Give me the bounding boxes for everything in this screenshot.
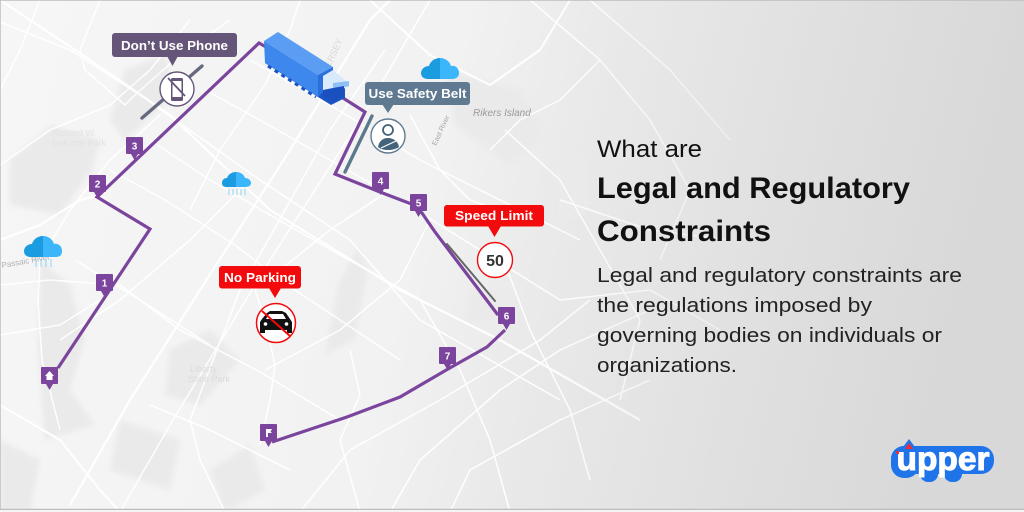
map labels: DeKorte Park [52, 138, 107, 148]
icon: rain cloud middle [222, 172, 251, 195]
pin: 3 [126, 137, 143, 160]
pin: home [41, 367, 58, 390]
map labels: East River [431, 114, 452, 147]
body text [597, 265, 962, 377]
pin: 7: 7 [445, 352, 451, 362]
pin: 4: 4 [378, 176, 384, 188]
body text: Legal and regulatory constraints are [597, 265, 962, 287]
icon: cloud top [421, 58, 459, 79]
heading: Constraints [597, 215, 771, 248]
heading [597, 136, 910, 248]
pin: 7 [439, 347, 456, 370]
pin: flag [260, 424, 277, 447]
callout: don't use phone: Don’t Use Phone [121, 38, 228, 53]
callout: speed limit: Speed Limit [455, 208, 534, 223]
callout: speed limit [444, 205, 544, 301]
body text: organizations. [597, 355, 737, 377]
pin: 5 [410, 194, 427, 217]
callout: use safety belt [345, 82, 470, 172]
pin: 6 [498, 307, 515, 330]
map labels [1, 37, 531, 384]
body text: governing bodies on individuals or [597, 325, 942, 347]
route line [58, 43, 505, 442]
heading: Legal and Regulatory [597, 172, 910, 205]
body text: the regulations imposed by [597, 295, 872, 317]
map labels: JERSEY [321, 37, 345, 73]
map labels: Richard W. [52, 128, 96, 138]
map labels: Rikers Island [473, 108, 531, 119]
logo: upper: upper [896, 440, 990, 477]
map labels: State Park [188, 374, 231, 384]
icon: no parking [256, 304, 296, 342]
pin: 2: 2 [95, 180, 101, 190]
pin: 2 [89, 175, 106, 198]
callout: don't use phone [112, 33, 237, 118]
pin: 5: 5 [416, 198, 422, 210]
icon: rain cloud left [24, 236, 62, 267]
map labels: Passaic River [1, 253, 51, 270]
icon: driver [371, 119, 405, 153]
pin: 4 [372, 172, 389, 195]
pin: 1: 1 [102, 278, 108, 290]
map labels: Liberty [190, 364, 218, 374]
truck [264, 32, 349, 105]
callout: no parking [219, 266, 301, 342]
pin: 1 [96, 274, 113, 297]
icon: no phone [160, 72, 194, 106]
pin: 3: 3 [132, 142, 138, 152]
route pins [41, 137, 515, 447]
callout: use safety belt: Use Safety Belt [368, 86, 467, 101]
callout: no parking: No Parking [224, 270, 296, 285]
pin: 6: 6 [504, 312, 510, 322]
icon: speed 50 sign: 50 [486, 253, 504, 270]
heading: What are [597, 136, 702, 163]
